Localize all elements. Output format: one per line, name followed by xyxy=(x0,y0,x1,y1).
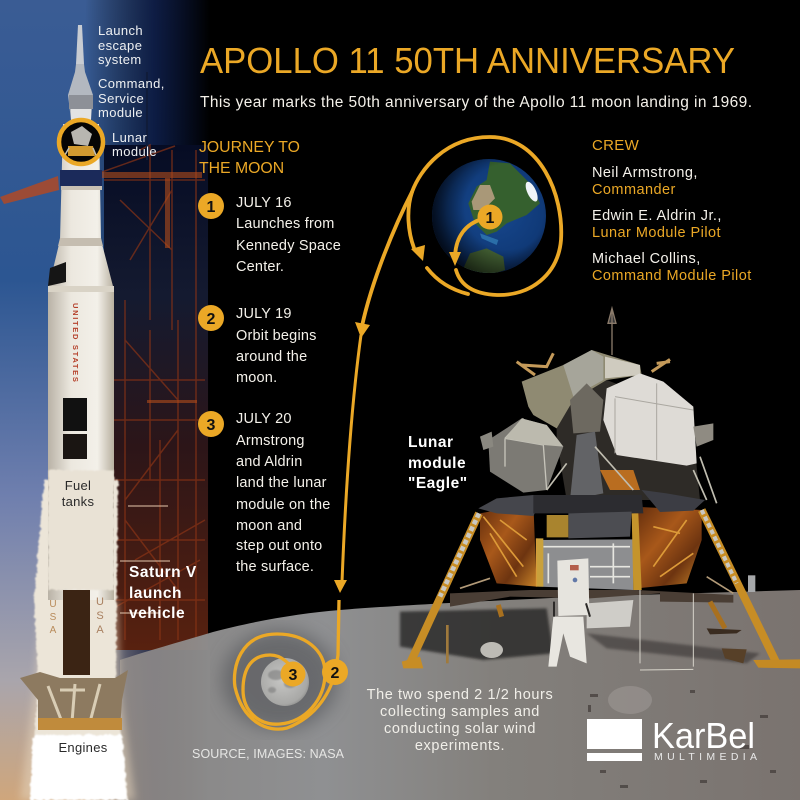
step 3: 3 xyxy=(207,417,216,434)
rocket labels xyxy=(58,23,197,755)
descent foil left xyxy=(480,503,537,587)
caption: two spend 2 1/2 hours: conducting solar wind xyxy=(384,721,536,737)
label: lunar module: Lunar xyxy=(112,130,147,145)
ground: lunar surface xyxy=(120,590,800,800)
foil creases xyxy=(483,517,693,587)
logo: KarBel Multimedia: MULTIMEDIA xyxy=(654,751,757,763)
label: launch escape system: Launch xyxy=(98,23,143,38)
step 1 xyxy=(198,193,341,275)
heading: journey to the moon: THE MOON xyxy=(199,160,284,177)
step 3: module on the xyxy=(236,497,330,513)
USA marking right: U xyxy=(96,596,104,608)
crane arm xyxy=(0,176,59,204)
step 2: Orbit begins xyxy=(236,328,317,344)
caption: two spend 2 1/2 hours: experiments. xyxy=(415,738,505,754)
moon xyxy=(261,658,309,706)
arrowhead: earth orbit entry xyxy=(449,252,461,266)
subtitle: This year marks the 50th anniversary of the Apollo 11 moon landing in 1969. xyxy=(200,94,752,111)
arrowhead: second orbit xyxy=(411,245,425,261)
label: launch escape system: system xyxy=(98,52,142,67)
label: lunar module Eagle: module xyxy=(408,455,466,472)
USA marking left: A xyxy=(50,625,57,636)
step 2: 2 xyxy=(207,311,216,328)
label: command service module: module xyxy=(98,105,143,120)
command module xyxy=(68,64,93,120)
crew list: Commander xyxy=(592,182,676,198)
centre dark column xyxy=(570,432,603,500)
left grey octagon xyxy=(488,418,563,493)
rocket: Saturn V launch vehicle xyxy=(20,25,135,800)
crew list: Command Module Pilot xyxy=(592,268,752,284)
label: lunar module: module xyxy=(112,144,157,159)
logo: KarBel Multimedia xyxy=(587,715,757,763)
step 1: Launches from xyxy=(236,216,335,232)
trajectory: earth orbit and path to the moon xyxy=(362,137,561,326)
step 1: 1 xyxy=(207,199,216,216)
lunar module inset ring xyxy=(59,120,103,164)
solar wind collector and small items xyxy=(640,590,693,670)
launch tower xyxy=(0,72,208,650)
struts xyxy=(547,447,717,503)
earth xyxy=(432,159,546,276)
label: Saturn V launch vehicle: vehicle xyxy=(129,605,185,622)
step 1: Kennedy Space xyxy=(236,238,341,254)
source credit: SOURCE, IMAGES: NASA xyxy=(192,747,345,761)
step 3: moon and xyxy=(236,518,302,534)
ground shade around moon xyxy=(222,630,338,730)
label: lunar module Eagle: Lunar xyxy=(408,434,454,451)
smoke and exhaust xyxy=(30,480,128,800)
heading: journey to the moon: JOURNEY TO xyxy=(199,139,300,156)
escape tower xyxy=(76,25,84,64)
badge 2 at moon orbit xyxy=(322,659,348,685)
shadow on ground xyxy=(400,608,553,660)
arrowhead: arrival at moon xyxy=(334,580,347,593)
label: Saturn V launch vehicle: Saturn V xyxy=(129,564,197,581)
crew list xyxy=(592,137,752,284)
right RCS xyxy=(693,423,713,447)
USA marking left: U xyxy=(49,599,57,610)
crew list: Edwin E. Aldrin Jr., xyxy=(592,208,722,224)
step 2: JULY 19 xyxy=(236,306,292,322)
antenna xyxy=(608,308,616,355)
trajectory: lunar orbit xyxy=(234,600,339,729)
machinery above hatch xyxy=(570,383,603,433)
gold RCS clusters xyxy=(517,353,670,375)
step 3: and Aldrin xyxy=(236,454,302,470)
MESA equipment bay xyxy=(538,539,633,590)
background: sky fade to black xyxy=(85,0,210,800)
step 3: JULY 20 xyxy=(236,411,292,427)
lower smoke veil xyxy=(48,470,114,590)
step 1: Center. xyxy=(236,259,284,275)
centre grey panel xyxy=(568,512,632,538)
step 3: land the lunar xyxy=(236,475,327,491)
white block xyxy=(603,373,697,466)
crew list: Michael Collins, xyxy=(592,251,701,267)
label: lunar module Eagle: "Eagle" xyxy=(408,475,468,492)
united states lettering: UNITED STATES xyxy=(71,303,80,384)
step 3 xyxy=(198,411,330,575)
label: command service module: Service xyxy=(98,91,144,106)
arrowhead: leaving earth orbit xyxy=(355,322,370,338)
left leg xyxy=(410,513,479,663)
badge 1 on earth: 1 xyxy=(486,210,495,227)
label: Saturn V launch vehicle: launch xyxy=(129,585,182,602)
rear leg xyxy=(498,602,725,628)
right leg xyxy=(702,510,777,663)
step 3: Armstrong xyxy=(236,433,305,449)
step 3: the surface. xyxy=(236,559,314,575)
crew list: CREW xyxy=(592,137,640,154)
USA marking right: A xyxy=(96,624,104,636)
backing structure xyxy=(557,380,700,500)
caption: two spend 2 1/2 hours: collecting samples and xyxy=(380,704,540,720)
astronaut xyxy=(548,558,590,667)
descent foil right xyxy=(633,507,702,588)
lower frame xyxy=(450,590,733,607)
step 1: JULY 16 xyxy=(236,195,292,211)
engines xyxy=(20,670,128,730)
background: launch sky xyxy=(0,0,210,800)
label: engines: Engines xyxy=(58,740,108,755)
crew list: Neil Armstrong, xyxy=(592,165,698,181)
badge 3 at moon xyxy=(280,662,306,686)
crew list: Lunar Module Pilot xyxy=(592,225,721,241)
step 2: moon. xyxy=(236,370,277,386)
step 2: around the xyxy=(236,349,307,365)
first stage dark panel xyxy=(63,590,90,675)
upper stage xyxy=(48,124,114,600)
label: fuel tanks: tanks xyxy=(62,494,94,509)
lunar module Eagle photo illustration xyxy=(400,308,800,670)
badge 1 on earth xyxy=(478,204,502,230)
ground: rock texture xyxy=(588,686,776,788)
logo: KarBel Multimedia: KarBel xyxy=(652,715,755,756)
label: command service module: Command, xyxy=(98,76,165,91)
step 3: step out onto xyxy=(236,538,322,554)
footpads xyxy=(402,657,423,668)
caption: two spend 2 1/2 hours: The two spend 2 1/2 hours xyxy=(367,687,553,703)
badge 3 at moon: 3 xyxy=(289,667,298,684)
USA marking right: S xyxy=(96,610,104,622)
ascent stage tan xyxy=(522,350,642,428)
smoke glow xyxy=(20,600,135,800)
step 2 xyxy=(198,305,317,386)
dark blankets xyxy=(478,495,542,516)
trajectory: transit to the moon xyxy=(342,335,361,582)
gold underside xyxy=(600,470,640,490)
title: APOLLO 11 50TH ANNIVERSARY xyxy=(200,40,735,81)
badge 2 at moon orbit: 2 xyxy=(331,665,340,682)
black tank bands xyxy=(63,398,87,431)
label: fuel tanks: Fuel xyxy=(65,478,91,493)
USA marking left: S xyxy=(50,612,57,623)
label: launch escape system: escape xyxy=(98,38,142,53)
